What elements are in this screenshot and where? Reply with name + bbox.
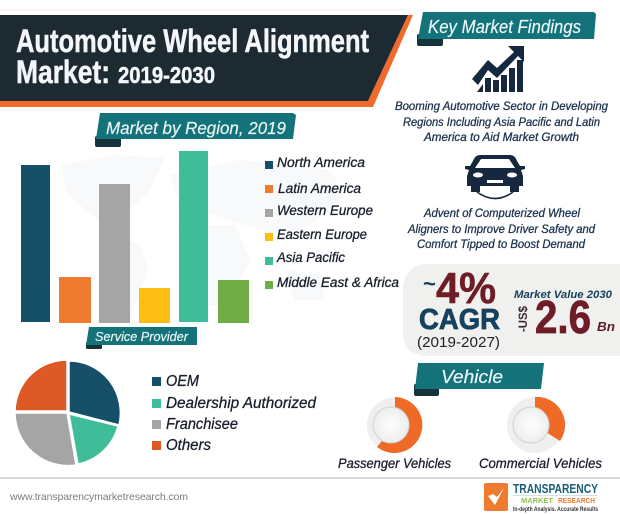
CAGR figure: (2019-2027) — [417, 334, 500, 351]
title text: Automotive Wheel Alignment — [16, 23, 369, 59]
legend: service provider — [152, 373, 317, 454]
icon: rising chart — [472, 46, 524, 92]
market value figure: -US$ — [516, 306, 530, 332]
legend: regions: Eastern Europe — [277, 227, 367, 242]
market value figure: Bn — [597, 319, 615, 334]
logo: Transparency Market Research: MARKET — [521, 496, 553, 505]
title text — [16, 23, 369, 90]
title banner — [0, 15, 413, 107]
text: finding one: Regions Including Asia Pacific and Latin — [403, 117, 600, 129]
heading: Market by Region — [95, 113, 296, 147]
world map backdrop — [62, 155, 345, 320]
icon: car — [465, 155, 525, 198]
market value figure: 2.6 — [535, 291, 591, 343]
legend: regions: North America — [277, 155, 365, 170]
donut: commercial vehicles — [507, 397, 565, 453]
CAGR figure — [417, 264, 500, 351]
heading: Key Market Findings: Key Market Findings — [428, 17, 581, 37]
heading: Vehicle — [414, 363, 544, 396]
heading: Vehicle: Vehicle — [441, 367, 503, 387]
logo: Transparency Market Research: TRANSPARENCY — [513, 482, 599, 496]
text: finding two: Advent of Computerized Wheel — [423, 208, 580, 220]
heading: Key Market Findings — [417, 12, 596, 46]
donut: passenger vehicles — [367, 397, 423, 453]
footer website: www.transparencymarketresearch.com — [9, 491, 188, 503]
text: finding one: America to Aid Market Growth — [423, 132, 579, 144]
legend: regions: Latin America — [278, 181, 361, 196]
legend: regions — [265, 155, 399, 290]
market value figure: Market Value 2030 — [514, 289, 613, 301]
title text: Market: — [16, 54, 110, 90]
legend: regions: Western Europe — [277, 203, 373, 218]
text: finding one — [395, 101, 609, 144]
heading: Market by Region: Market by Region, 2019 — [106, 118, 286, 138]
text: finding two: Aligners to Improve Driver Safety and — [407, 224, 596, 236]
legend: regions: Asia Pacific — [276, 250, 345, 265]
panel: CAGR and market value — [403, 264, 620, 356]
label: passenger vehicles: Passenger Vehicles — [338, 455, 451, 471]
text: finding two — [407, 208, 596, 251]
text: finding two: Comfort Tipped to Boost Demand — [417, 239, 586, 251]
pie chart: service provider — [15, 360, 120, 466]
legend: service provider: Franchisee — [166, 416, 238, 433]
legend: service provider: OEM — [166, 373, 199, 390]
legend: regions: Middle East & Africa — [277, 275, 399, 290]
market value figure — [514, 289, 615, 343]
legend: service provider: Others — [166, 437, 211, 454]
heading: Service Provider — [86, 327, 197, 349]
bar chart: market by region — [21, 151, 249, 323]
heading: Service Provider: Service Provider — [95, 330, 189, 344]
text: finding one: Booming Automotive Sector in Developing — [395, 101, 609, 113]
logo: Transparency Market Research — [484, 482, 599, 513]
CAGR figure: 4% — [436, 264, 496, 313]
CAGR figure: CAGR — [419, 304, 500, 336]
label: commercial vehicles: Commercial Vehicles — [479, 455, 602, 471]
CAGR figure: ~ — [423, 271, 436, 296]
legend: service provider: Dealership Authorized — [166, 395, 317, 412]
logo: Transparency Market Research: RESEARCH — [558, 496, 595, 505]
title text: 2019-2030 — [118, 62, 215, 88]
